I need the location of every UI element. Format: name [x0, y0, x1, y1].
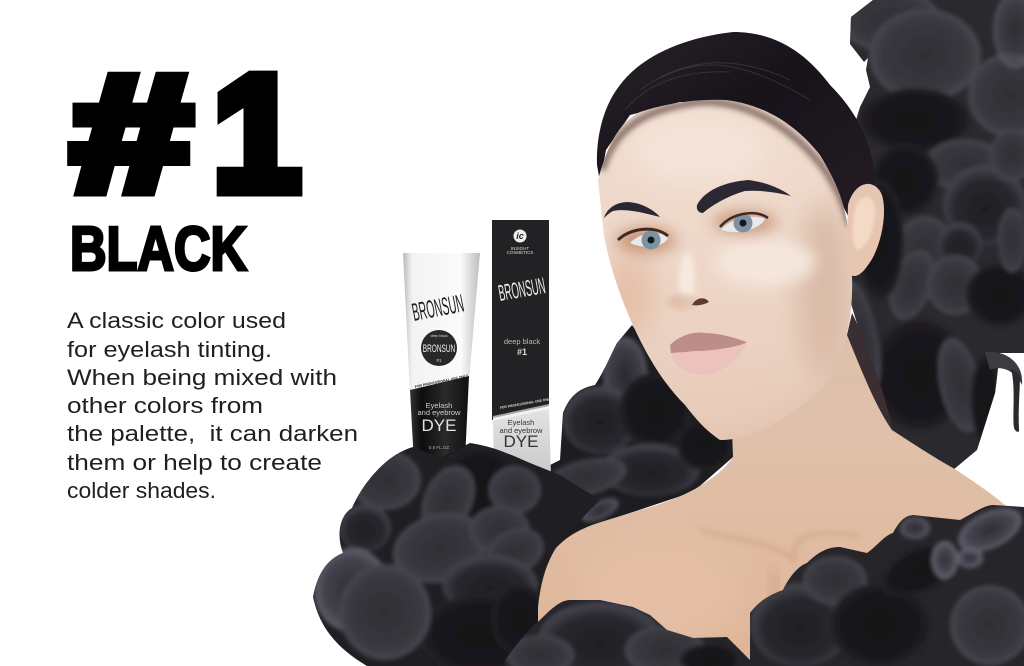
- box logo: ic roundel: ic: [516, 231, 524, 241]
- description text: A classic color used: [67, 308, 286, 333]
- box logo: ic roundel: [514, 230, 526, 242]
- product: Bronsun dye box: [492, 220, 553, 475]
- tube volume: 0.5 FL.OZ: [429, 445, 449, 450]
- neck and shoulders: [538, 333, 1006, 660]
- ear: [846, 184, 884, 276]
- woman portrait: [538, 32, 1024, 666]
- heading: #1: #: [72, 43, 191, 225]
- heading: #1: 1: [213, 42, 301, 226]
- box product name: Eyelash: [508, 418, 534, 427]
- tube product name: Eyelash: [426, 401, 452, 410]
- box shade number: #1: [517, 347, 527, 357]
- subheading: BLACK: BLACK: [70, 215, 247, 284]
- face: [598, 100, 852, 440]
- tube usage line: FOR PROFESSIONAL USE ONLY: [414, 374, 469, 389]
- description text: When being mixed with: [67, 365, 337, 390]
- description text: for eyelash tinting.: [67, 337, 272, 362]
- box shade name: deep black: [504, 337, 540, 346]
- description text: the palette, it can darken: [67, 421, 358, 446]
- product: Bronsun dye tube: [403, 253, 480, 520]
- lips: [670, 332, 747, 375]
- box product name: and eyebrow: [500, 426, 543, 435]
- box product name: [500, 418, 543, 451]
- tube product name: [418, 401, 461, 435]
- box maker name: INSIGHT: [511, 246, 529, 251]
- box maker name line 2: COSMETICS: [507, 250, 533, 255]
- smoke: upper right ink cloud: [836, 0, 1024, 470]
- description text: [67, 308, 358, 503]
- nose: [667, 252, 709, 310]
- description text: other colors from: [67, 393, 263, 418]
- smoke: lower left ink cloud: [313, 443, 600, 666]
- description text: colder shades.: [67, 478, 216, 503]
- tube shade roundel: deep black: [431, 334, 448, 338]
- tube product name: DYE: [422, 416, 456, 435]
- tube brand name: BRONSUN: [410, 290, 466, 327]
- tube product name: and eyebrow: [418, 408, 461, 417]
- face shading: [600, 100, 852, 440]
- description text: them or help to create: [67, 450, 322, 475]
- hair tail behind neck: [847, 313, 893, 431]
- tube shade roundel: BRONSUN: [423, 342, 455, 354]
- tube shade roundel: [421, 330, 457, 366]
- smoke: cloud behind neck and products: [550, 325, 733, 546]
- eye: right with brow: [697, 180, 791, 234]
- heading: #1: [72, 42, 301, 226]
- box brand name: BRONSUN: [496, 272, 547, 306]
- eye: left with brow: [604, 202, 676, 253]
- tube shade roundel: #1: [436, 358, 442, 363]
- hair: [597, 32, 875, 220]
- box usage line: FOR PROFESSIONAL USE ONLY: [499, 397, 553, 410]
- smoke: bottom ink cloud over chest: [505, 499, 1024, 666]
- box product name: DYE: [504, 432, 538, 451]
